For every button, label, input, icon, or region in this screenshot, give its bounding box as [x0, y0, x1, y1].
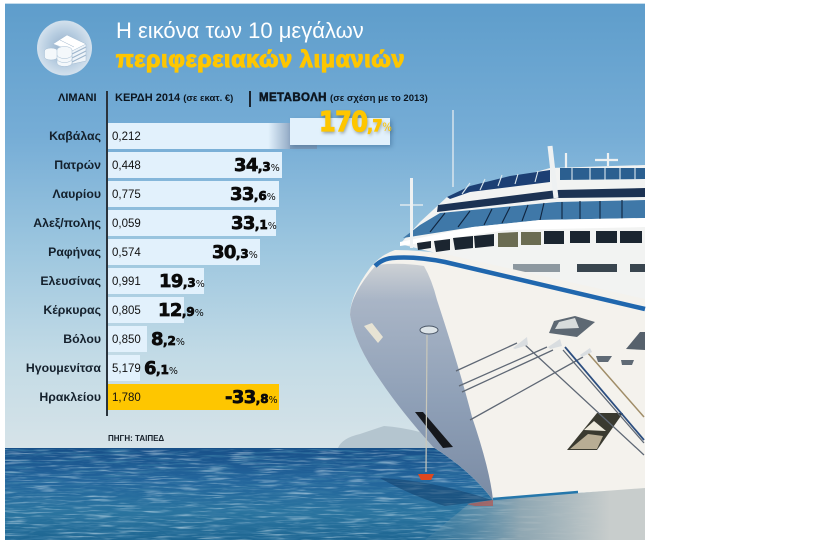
row: Kavala: Καβάλας [49, 129, 101, 143]
row: Rafina: 30,3% [212, 242, 258, 263]
row: Alexandroupoli: Αλεξ/πολης [33, 216, 101, 230]
row: Alexandroupoli [33, 210, 277, 236]
row: Rafina: Ραφήνας [48, 245, 101, 259]
row: Lavrio [52, 181, 279, 207]
row: Rafina: 0,574 [112, 247, 141, 259]
row: Elefsina: 0,991 [112, 276, 141, 288]
row: Kerkyra: Κέρκυρας [43, 303, 101, 317]
row: Kerkyra: 0,805 [112, 305, 141, 317]
row: Lavrio: Λαυρίου [52, 187, 101, 201]
row: Irakleio: -33,8% [225, 387, 278, 408]
row: Patras [54, 152, 282, 178]
row: Kavala: 0,212 [112, 131, 141, 143]
row: Elefsina: 19,3% [159, 271, 205, 292]
row: Igoumenitsa: 5,179 [112, 363, 141, 375]
row: Igoumenitsa [26, 355, 178, 381]
row: Patras: 34,3% [234, 155, 280, 176]
hull details [549, 316, 595, 337]
column: profit: ΚΕΡΔΗ 2014 (σε εκατ. €) [115, 92, 233, 104]
row: Elefsina: Ελευσίνας [40, 274, 101, 288]
distant island [338, 426, 437, 448]
title line 1: Η εικόνα των 10 μεγάλων [116, 18, 364, 43]
axis line [106, 91, 108, 416]
row: Lavrio: 33,6% [230, 184, 276, 205]
ship hull [350, 250, 645, 500]
highlight box [290, 118, 390, 145]
row: Igoumenitsa: Ηγουμενίτσα [26, 361, 101, 375]
foam in front of bow [425, 487, 645, 540]
row: Kavala [49, 105, 394, 149]
hull shadow [350, 264, 493, 500]
row: Alexandroupoli: 33,1% [231, 213, 277, 234]
column: change: ΜΕΤΑΒΟΛΗ (σε σχέση με το 2013) [259, 92, 428, 104]
row: Irakleio: 1,780 [112, 392, 141, 404]
column: ports: ΛΙΜΑΝΙ [58, 92, 96, 104]
row: Irakleio: Ηρακλείου [39, 390, 101, 404]
row: Elefsina [40, 268, 205, 294]
row: Volos [63, 326, 185, 352]
table header [58, 91, 428, 107]
row: Volos: Βόλου [63, 332, 101, 346]
row: Patras: Πατρών [54, 158, 101, 172]
row: Igoumenitsa: 6,1% [144, 358, 178, 379]
row: Irakleio [39, 384, 279, 410]
row: Kerkyra: 12,9% [158, 300, 204, 321]
source: ΠΗΓΗ: ΤΑΙΠΕΔ [108, 434, 164, 443]
value 170,7%: 170,7% [319, 105, 392, 138]
hull stripe [375, 258, 645, 309]
row: Lavrio: 0,775 [112, 189, 141, 201]
row: Alexandroupoli: 0,059 [112, 218, 141, 230]
row: Kerkyra [43, 297, 204, 323]
row: Volos: 8,2% [151, 329, 185, 350]
title line 2: περιφερειακών λιμανιών [116, 46, 405, 72]
superstructure [400, 165, 645, 305]
icon: money and coins badge [37, 20, 92, 76]
row: Volos: 0,850 [112, 334, 141, 346]
fold of the highlight bar [290, 145, 317, 149]
title [116, 18, 405, 73]
row: Rafina [48, 239, 260, 265]
row: Patras: 0,448 [112, 160, 141, 172]
masts [400, 110, 618, 248]
